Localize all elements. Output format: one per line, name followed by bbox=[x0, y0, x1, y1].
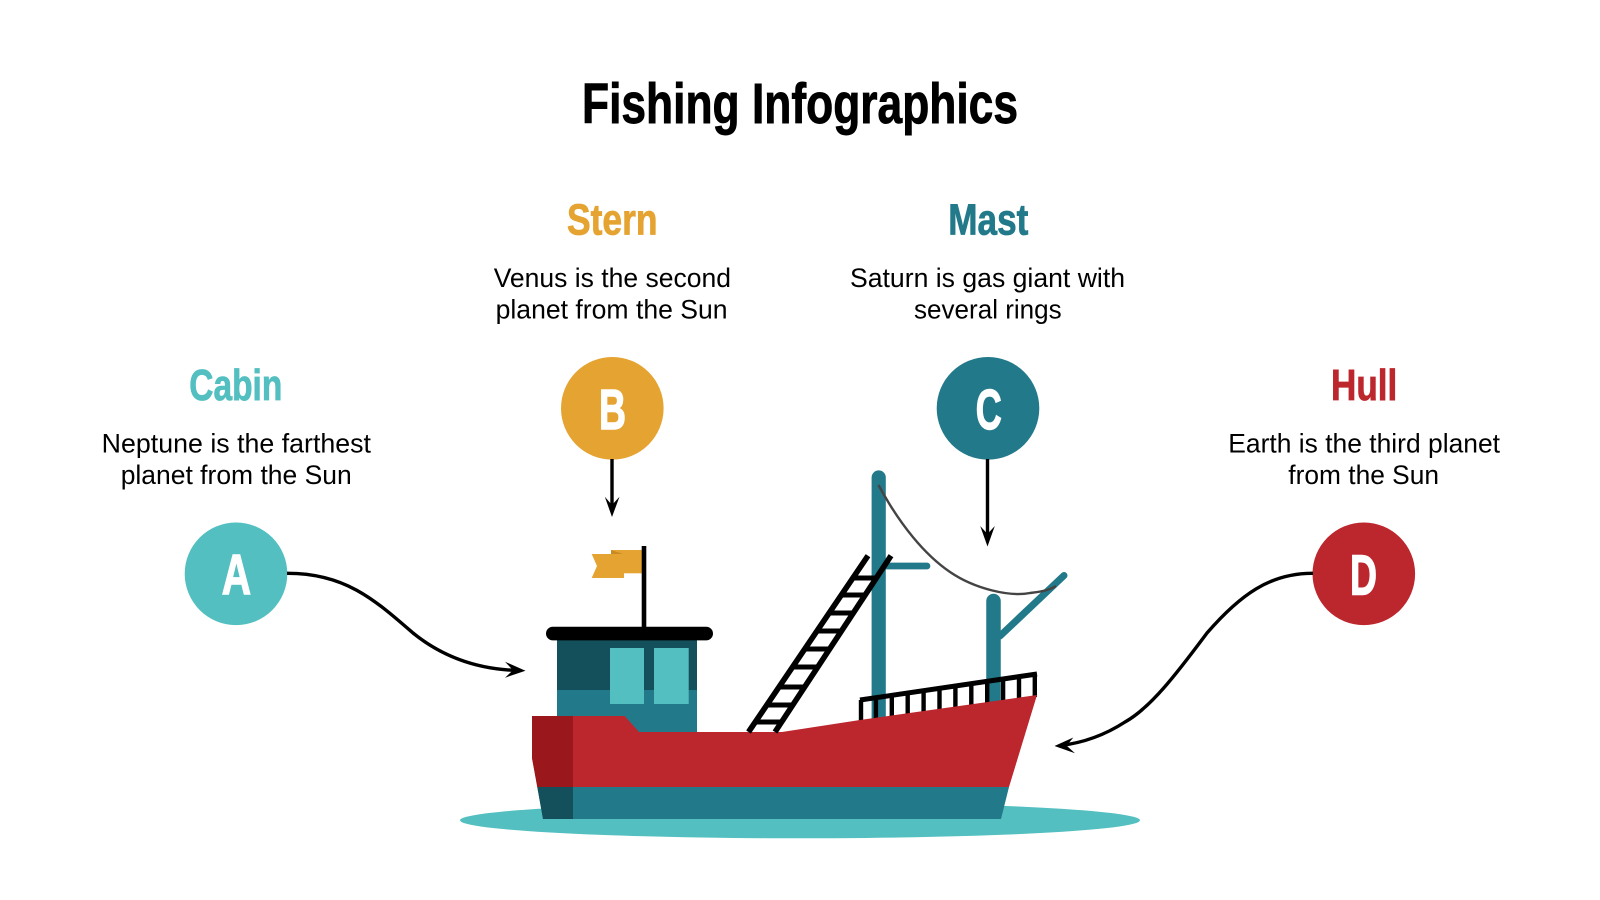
badge D bbox=[1312, 522, 1415, 625]
text block: Hull description: from the Sun bbox=[1288, 460, 1439, 490]
badge A: A bbox=[222, 543, 251, 607]
text block: Stern description: planet from the Sun bbox=[496, 294, 728, 324]
text block: Mast description: Saturn is gas giant with bbox=[850, 263, 1125, 293]
text block: Hull description bbox=[1228, 429, 1501, 490]
text block: Cabin description bbox=[102, 429, 372, 490]
badge B: B bbox=[599, 378, 626, 442]
arrow: B to flag bbox=[605, 459, 620, 517]
text block: Stern description bbox=[494, 263, 731, 324]
illustration: fishing boat bbox=[460, 478, 1140, 838]
text block: Cabin description: Neptune is the farthest bbox=[102, 429, 372, 459]
arrow: C to rigging bbox=[980, 459, 995, 546]
badge D: D bbox=[1350, 544, 1377, 608]
flag bbox=[592, 546, 646, 630]
water bbox=[460, 802, 1140, 838]
panel: mast callout bbox=[850, 196, 1125, 460]
masts and rigging bbox=[878, 478, 1064, 730]
railing bbox=[860, 674, 1037, 735]
heading: Mast: Mast bbox=[948, 196, 1029, 244]
arrow: A to cabin bbox=[287, 573, 526, 678]
text block: Hull description: Earth is the third planet bbox=[1228, 429, 1501, 459]
ladder bbox=[748, 556, 891, 732]
badge C bbox=[937, 357, 1039, 460]
badge A bbox=[185, 522, 287, 625]
badge B bbox=[561, 357, 664, 460]
cabin bbox=[546, 627, 713, 733]
hull bbox=[532, 695, 1037, 819]
text block: Mast description bbox=[850, 263, 1125, 324]
text block: Cabin description: planet from the Sun bbox=[121, 460, 352, 490]
panel: hull callout bbox=[1228, 361, 1501, 625]
badge C: C bbox=[976, 378, 1002, 442]
panel: stern callout bbox=[494, 196, 731, 460]
heading: Cabin: Cabin bbox=[189, 361, 282, 410]
heading: Hull: Hull bbox=[1331, 361, 1397, 410]
text block: Mast description: several rings bbox=[914, 294, 1062, 324]
heading: Stern: Stern bbox=[567, 196, 658, 245]
arrow: D to hull bbox=[1054, 573, 1313, 753]
text block: Stern description: Venus is the second bbox=[494, 263, 731, 293]
panel: cabin callout bbox=[102, 361, 372, 625]
title: Fishing Infographics bbox=[582, 72, 1018, 136]
